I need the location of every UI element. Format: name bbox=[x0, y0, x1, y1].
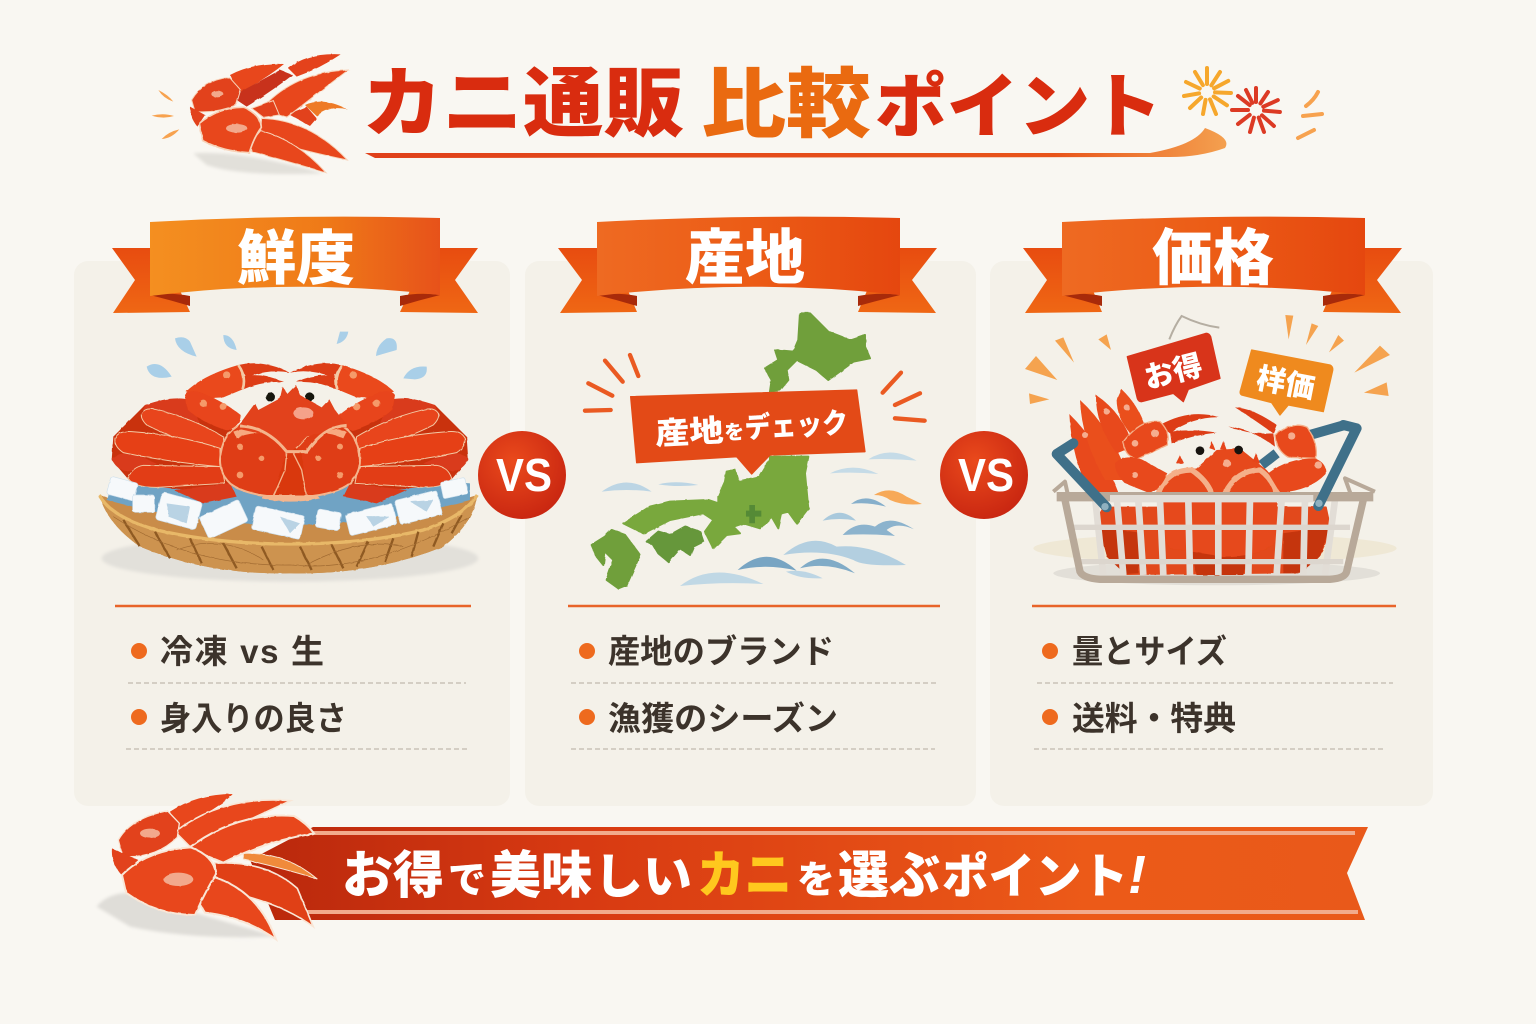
list: 産地 points: 産地のブランド bbox=[608, 633, 834, 670]
icon: water drops bbox=[147, 332, 427, 379]
crab body bbox=[1097, 507, 1332, 575]
ribbon: 価格 bbox=[1023, 217, 1402, 313]
banner message: で bbox=[448, 860, 486, 902]
Shikoku bbox=[647, 527, 703, 562]
panel: 価格 bbox=[990, 261, 1433, 806]
basket rim and weave bbox=[99, 495, 477, 573]
callout: 産地をデェック bbox=[631, 390, 865, 474]
VS badge right bbox=[940, 431, 1028, 519]
crab claws bbox=[1160, 414, 1219, 433]
title: カニ通販 bbox=[362, 62, 684, 147]
banner message: お得 bbox=[342, 847, 444, 904]
basket handle back bbox=[1262, 425, 1345, 465]
callout: 産地をデェック: を bbox=[724, 421, 745, 445]
list: 鮮度 points bbox=[131, 633, 347, 737]
basket grid bbox=[1053, 478, 1375, 579]
list: 価格 points: 量とサイズ bbox=[1072, 633, 1227, 670]
title: ポイント bbox=[875, 68, 1162, 146]
icon: map rays bbox=[585, 355, 925, 421]
banner message: 選ぶ bbox=[838, 847, 940, 904]
illustration: crab in shopping basket bbox=[1025, 315, 1397, 585]
banner message: を bbox=[797, 860, 835, 902]
banner message: ! bbox=[1128, 845, 1146, 905]
title bbox=[362, 62, 1162, 148]
icon: burst rays bbox=[1025, 315, 1390, 404]
banner message: 美味 bbox=[490, 847, 592, 904]
panel: 鮮度 bbox=[74, 261, 510, 806]
heading: 産地: 産地 bbox=[685, 225, 805, 292]
title underline brush stroke bbox=[365, 128, 1226, 158]
tag: 样価 bbox=[1240, 350, 1333, 415]
list: 価格 points bbox=[1042, 633, 1236, 737]
bottom banner bbox=[250, 827, 1368, 920]
tag: お得 bbox=[1127, 333, 1220, 402]
list: 産地 points: 漁獲のシーズン bbox=[608, 700, 838, 737]
heading: 価格: 価格 bbox=[1152, 224, 1274, 292]
list: 鮮度 points: 冷凍 vs 生 bbox=[160, 633, 324, 670]
title: 比較 bbox=[701, 63, 871, 148]
ribbon: 産地 bbox=[558, 217, 937, 313]
ice cubes bbox=[106, 476, 468, 540]
callout: 産地をデェック: デェック bbox=[744, 407, 849, 445]
icon: header crab claws bbox=[152, 54, 348, 174]
banner message bbox=[342, 845, 1146, 905]
panel: 産地 bbox=[525, 261, 976, 806]
tag: 样価: 样価 bbox=[1254, 362, 1317, 406]
ribbon: 鮮度 bbox=[112, 217, 478, 313]
icon: banner crab claws bbox=[97, 794, 317, 939]
tag: お得: お得 bbox=[1141, 349, 1206, 395]
Honshu bbox=[623, 457, 808, 548]
list: 価格 points: 送料・特典 bbox=[1072, 700, 1236, 737]
illustration: Japan map bbox=[585, 313, 925, 588]
banner message: ポイント bbox=[942, 851, 1128, 904]
VS badge left bbox=[478, 431, 566, 519]
callout: 産地をデェック: 産地 bbox=[654, 414, 725, 452]
basket handle front bbox=[1057, 425, 1357, 507]
illustration: snow crab on ice bbox=[99, 332, 478, 582]
sea waves bbox=[602, 452, 922, 586]
heading: 鮮度: 鮮度 bbox=[237, 226, 355, 292]
list: 鮮度 points: 身入りの良さ bbox=[160, 700, 347, 737]
list: 産地 points bbox=[579, 633, 838, 737]
VS badge right: VS bbox=[958, 449, 1014, 501]
VS badge left: VS bbox=[496, 449, 552, 501]
crab legs bbox=[1069, 414, 1120, 497]
banner message: カニ bbox=[697, 847, 792, 904]
Hokkaido bbox=[765, 313, 870, 392]
Kyushu bbox=[592, 530, 640, 588]
icon: fireworks bbox=[1184, 68, 1322, 138]
basket bowl bbox=[99, 495, 477, 573]
banner message: しい bbox=[594, 851, 692, 904]
